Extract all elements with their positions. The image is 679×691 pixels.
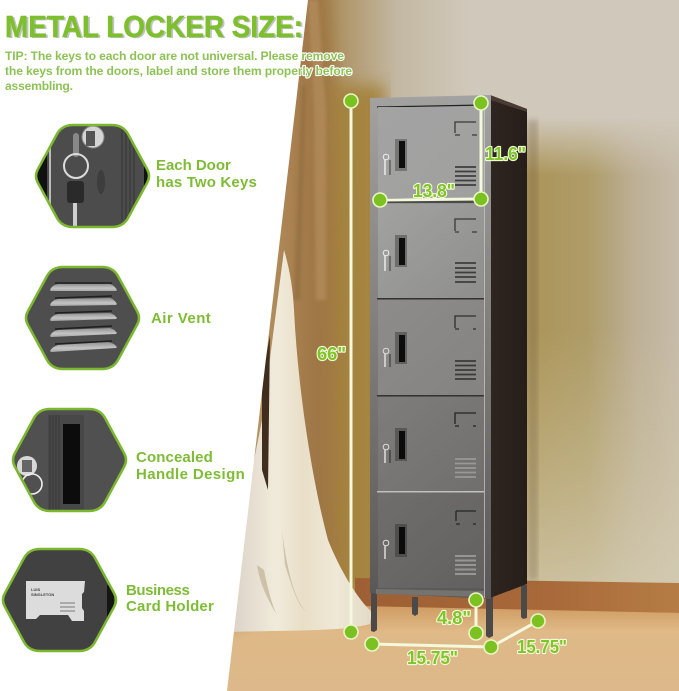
icon: business card holder hexagon: SINGLETON xyxy=(31,592,54,597)
brown curtain xyxy=(225,0,345,632)
dimension: door width 13.8 inches xyxy=(373,181,488,207)
icon: business card holder hexagon xyxy=(2,548,118,652)
icon: door keys hexagon xyxy=(34,124,150,228)
tip text xyxy=(5,49,352,93)
dimension: leg height 4.8 inches: 4.8" xyxy=(437,608,471,628)
floor xyxy=(220,606,679,691)
icon: concealed handle hexagon xyxy=(12,408,128,512)
dimension: door width 13.8 inches: 13.8" xyxy=(413,181,455,201)
icon: business card holder hexagon: LUIS xyxy=(31,587,40,592)
tip text: assembling. xyxy=(5,79,73,93)
dimension: height 66 inches: 66" xyxy=(317,344,346,364)
icon: air vent hexagon xyxy=(24,266,140,370)
locker front frame xyxy=(370,95,491,599)
label: each door has two keys: Each Door xyxy=(156,157,231,174)
label: concealed handle design: Concealed xyxy=(136,449,213,466)
dimension: height 66 inches xyxy=(317,94,358,639)
dimension: base width and depth 15.75 inches: 15.75" xyxy=(407,648,458,668)
label: concealed handle design: Handle Design xyxy=(136,466,245,483)
metal locker xyxy=(370,95,538,638)
room background xyxy=(220,0,679,691)
label: each door has two keys: has Two Keys xyxy=(156,174,257,191)
cream curtain xyxy=(230,250,372,632)
label: air vent: Air Vent xyxy=(151,310,211,327)
door 4 xyxy=(378,397,484,491)
locker legs xyxy=(371,585,527,638)
label: concealed handle design xyxy=(136,449,245,483)
title: METAL LOCKER SIZE: xyxy=(7,11,305,45)
tip text: the keys from the doors, label and store them properly before xyxy=(5,64,352,78)
white panel xyxy=(0,0,308,691)
dimension: leg height 4.8 inches xyxy=(437,593,483,640)
dimension: door height 11.6 inches xyxy=(474,96,526,199)
dimension: base width and depth 15.75 inches: 15.75" xyxy=(517,637,567,657)
door 3 xyxy=(378,300,484,395)
dimension: base width and depth 15.75 inches xyxy=(365,614,567,668)
tip text: TIP: The keys to each door are not universal. Please remove xyxy=(5,49,344,63)
title: METAL LOCKER SIZE: xyxy=(5,10,303,44)
label: business card holder: Card Holder xyxy=(126,598,214,615)
label: each door has two keys xyxy=(156,157,257,191)
door 2 xyxy=(378,204,484,298)
door 5 xyxy=(378,493,484,588)
dimension: door height 11.6 inches: 11.6" xyxy=(485,144,526,164)
label: business card holder: Business xyxy=(126,582,190,599)
label: business card holder xyxy=(126,582,214,615)
baseboard xyxy=(355,578,679,613)
door 1 xyxy=(378,107,484,198)
locker side xyxy=(490,95,527,598)
